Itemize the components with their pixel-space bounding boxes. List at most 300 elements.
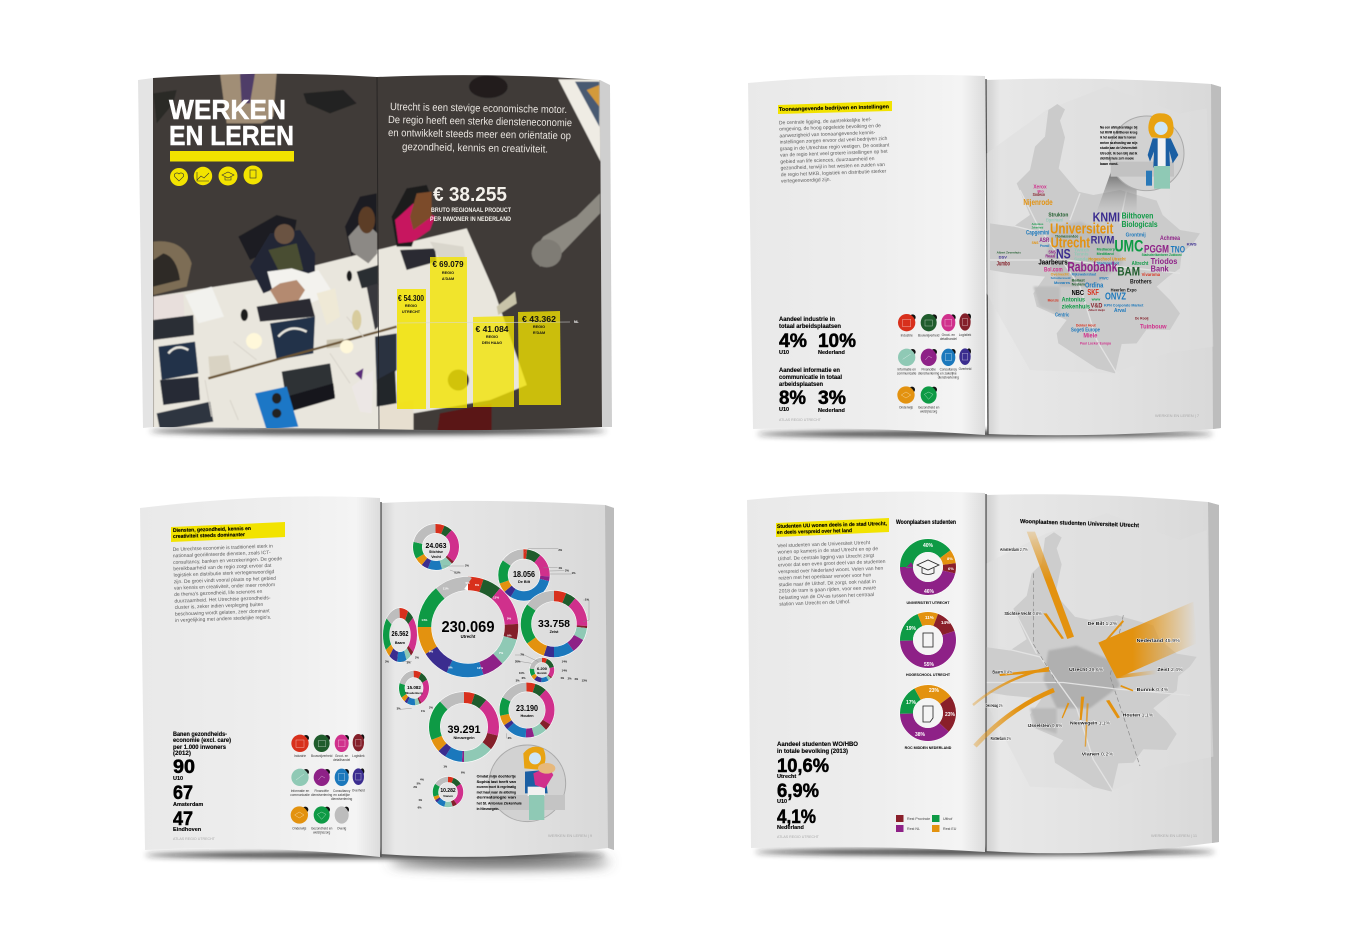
- left page: [140, 496, 380, 857]
- body text: belasting van de OV-as tussen het centraal: [779, 592, 874, 601]
- papers and keyboards: [153, 296, 154, 330]
- donut: Zeist: 33.758: [538, 618, 570, 630]
- bar chart: GRP per region: NL: [574, 320, 580, 324]
- left page: [747, 492, 985, 852]
- body text: aanwezigheid van toonaangevende kennis-: [779, 130, 876, 139]
- word cloud: Mediacorp: [1097, 248, 1116, 252]
- leader labels for small segments: 1%: [560, 676, 565, 680]
- key figures: student share: 10,6%: [777, 756, 829, 777]
- sector legend icons: Financiële: [921, 368, 936, 372]
- word cloud: Miele: [1083, 332, 1098, 339]
- leader labels for small segments: 2%: [429, 705, 433, 709]
- word cloud: Bilthoven: [1122, 211, 1153, 220]
- headline figure: gross regional product: [430, 184, 511, 223]
- key figures: industry and ICT share: Aandeel informatie en: [779, 367, 840, 374]
- intro text: en ontwikkelt steeds meer een oriëntatie op: [388, 127, 571, 142]
- bar chart: GRP per region: [397, 257, 580, 409]
- key figures: health economy jobs: (2012): [173, 750, 191, 757]
- word cloud: Eigen Haard: [1046, 218, 1063, 223]
- word cloud: Bio: [1037, 188, 1044, 193]
- leader labels for small segments: 3%: [407, 660, 411, 664]
- donut: Utrecht: 7%: [499, 651, 503, 655]
- leader labels for small segments: 14%: [562, 669, 568, 673]
- donut: Universiteit Utrecht: 40%: [923, 543, 934, 549]
- word cloud: Rabobank: [1067, 259, 1117, 275]
- donut: Vianen: [436, 780, 460, 804]
- donut: Universiteit Utrecht: 6%: [948, 566, 954, 571]
- key figures: industry and ICT share: 3%: [818, 388, 846, 409]
- key figures: health economy jobs: U10: [173, 776, 183, 782]
- word cloud: Triodos: [1151, 256, 1177, 266]
- place labels: Amsterdam 2,7%: [1000, 547, 1028, 552]
- bar chart: GRP per region: € 41.084: [476, 325, 509, 334]
- bar chart: GRP per region: REGIO: [486, 335, 498, 339]
- word cloud: Altrecht: [1132, 261, 1148, 267]
- callout: student with bubble: werken na afronding van mijn: [1099, 141, 1137, 145]
- word cloud: www: [1091, 298, 1100, 302]
- desk: [153, 228, 527, 435]
- donut: Woudenberg: 15.082: [407, 685, 421, 690]
- donut: ROC Midden Nederland: [905, 688, 956, 750]
- leader labels for small segments: 8,5%: [454, 570, 461, 574]
- key figures: industry and ICT share: [779, 316, 856, 422]
- map title: Woonplaatsen studenten Universiteit Utrecht: [1020, 519, 1139, 529]
- sector legend icons: Gezondheid en: [311, 826, 333, 830]
- donut: Utrecht: 9%: [448, 665, 453, 669]
- word cloud: TNO: [1171, 244, 1185, 254]
- leader labels for small segments: 1%: [558, 566, 563, 570]
- body text: bereikbaarheid van de regio zorgt ervoor dat: [173, 563, 272, 572]
- key figures: health economy jobs: ATLAS REGIO UTRECHT: [173, 837, 216, 841]
- key figures: health economy jobs: per 1.000 inwoners: [173, 744, 227, 751]
- word cloud: Capgemini: [1026, 230, 1049, 237]
- title: werken en leren: EN LEREN: [169, 120, 294, 151]
- callout: student with bubble: baan vond.: [1100, 162, 1118, 166]
- word cloud: Movares: [1054, 280, 1071, 285]
- sector legend icons: Groot- en: [942, 333, 955, 337]
- word cloud: Universiteit: [1050, 220, 1113, 237]
- key figures: industry and ICT share: arbeidsplaatsen: [779, 381, 823, 388]
- intro text: Utrecht is een stevige economische motor.: [390, 101, 567, 116]
- callout: doctor Sophia with child: Omdat mijn dochtertje: [477, 775, 516, 779]
- sector legend icons: dienstverlening: [331, 797, 353, 801]
- leader labels for small segments: 3%: [508, 736, 512, 740]
- word cloud: Stadsgenoot: [1097, 261, 1120, 265]
- key figures: industry and ICT share: communicatie in totaal: [779, 374, 842, 381]
- body text: cluster is, zeker indien verpleging buiten: [175, 602, 264, 611]
- donut: Utrecht: [421, 581, 512, 670]
- word cloud: [997, 184, 1197, 345]
- leader labels for small segments: 4%: [420, 778, 424, 782]
- callout: student with bubble: [1096, 113, 1184, 213]
- key figures: industry and ICT share: U10: [779, 350, 789, 356]
- heading: diensten, gezondheid: [171, 522, 285, 542]
- donut: ROC Midden Nederland: 23%: [945, 712, 956, 718]
- donut: ROC Midden Nederland: 38%: [915, 732, 926, 738]
- body text: [173, 543, 284, 624]
- sector legend icons: Bouwnijverheid: [918, 334, 940, 338]
- word cloud: Meditland: [1097, 252, 1114, 256]
- word cloud: Schuttersveld: [1051, 276, 1071, 280]
- leader labels for small segments: 13%: [582, 679, 588, 683]
- key figures: health economy jobs: economie (excl. care): [173, 737, 231, 744]
- key figures: industry and ICT share: ATLAS REGIO UTRECHT: [779, 418, 822, 422]
- leader labels for small segments: 2%: [558, 548, 563, 552]
- callout: doctor Sophia with child: het St. Antonius Ziekenhuis: [477, 801, 522, 805]
- sector legend icons: Informatie en: [291, 789, 309, 793]
- word cloud: RIVM: [1091, 234, 1114, 246]
- leader labels for small segments: 6%: [522, 676, 526, 680]
- word cloud: Ballast: [1072, 277, 1085, 282]
- word cloud: Grontmij: [1126, 233, 1146, 239]
- page number: WERKEN EN LEREN | 7: [1155, 413, 1200, 418]
- callout: doctor Sophia with child: in Nieuwegein.: [477, 807, 499, 811]
- donut: Stichtse Vecht: [418, 528, 454, 566]
- body text: Veel studenten van de Universiteit Utrecht: [777, 540, 871, 549]
- body text: consultancy, banken en verzekeringen. De goede: [173, 556, 282, 566]
- bookshelf: [558, 79, 601, 162]
- donut: ROC Midden Nederland: ROC MIDDEN NEDERLAND: [905, 746, 952, 750]
- word cloud: Strukton: [1048, 213, 1069, 219]
- donut: Universiteit Utrecht: 8%: [947, 556, 953, 561]
- donut: Baarn: Baarn: [395, 641, 405, 645]
- leader labels for small segments: 4%: [574, 677, 579, 681]
- leader labels for small segments: 2%: [465, 564, 469, 568]
- place labels: De Bilt 1,2%: [1088, 621, 1118, 626]
- word cloud: Vivaroma: [1142, 272, 1160, 277]
- bar chart: GRP per region: REGIO: [405, 304, 417, 308]
- word cloud: Paul Locker Europa: [1080, 341, 1112, 345]
- word cloud: Rijkswaterstaat: [1072, 272, 1097, 276]
- seated person below bars: [437, 404, 492, 430]
- theme icons: [170, 166, 262, 186]
- word cloud: Arval: [1114, 308, 1126, 314]
- word cloud: ziekenhuis: [1062, 303, 1090, 310]
- donut: Utrecht: 5%: [466, 581, 470, 585]
- sector legend icons: dienstverlening: [918, 372, 940, 376]
- place labels: Rotterdam 2%: [991, 736, 1011, 741]
- sector legend icons: Informatie en: [897, 368, 916, 372]
- spread 4: students: [747, 492, 1219, 855]
- body text: Uithof. De centrale ligging van Utrecht zorgt: [778, 553, 875, 562]
- right woman: [392, 185, 430, 247]
- donut: Hogeschool Utrecht: 14%: [941, 620, 950, 625]
- donut: Zeist: Zeist: [550, 630, 559, 634]
- body text: wonen op kamers in de stad Utrecht en op de: [777, 546, 878, 556]
- place labels: Zeist 2,4%: [1157, 667, 1183, 672]
- word cloud: Dekker Hout: [1076, 323, 1096, 327]
- word cloud: V&D: [1091, 303, 1102, 310]
- leader labels for small segments: 6%: [418, 805, 422, 809]
- word cloud: Tuinbouw: [1140, 323, 1167, 330]
- legend: residence: [896, 815, 957, 832]
- donut: Baarn: 26.562: [392, 629, 408, 638]
- word cloud: KWS: [1187, 242, 1197, 247]
- bar chart: GRP per region: REGIO: [442, 271, 454, 275]
- donut: Baarn: [386, 613, 414, 657]
- word cloud: KPN Corporate Market: [1104, 304, 1144, 308]
- donut: ROC Midden Nederland: 23%: [929, 688, 940, 694]
- body text: verspreid over Nederland woont. Velen van hen: [778, 566, 884, 575]
- callout: doctor Sophia with child: [477, 745, 566, 822]
- key figures: student share: 6,9%: [777, 781, 819, 802]
- sector legend icons: detailhandel: [333, 758, 350, 762]
- body text: van kennis en creativiteit, onder meer rondom: [174, 582, 275, 592]
- callout: student with bubble: Na een afstudeerstage bij: [1100, 126, 1137, 130]
- intro text: gezondheid, kennis en creativiteit.: [402, 141, 548, 156]
- title: werken en leren: WERKEN: [169, 94, 286, 125]
- sector legend icons: Overheid: [959, 367, 972, 371]
- body text: gezondheid, terwijl in het westen en zuiden van: [780, 162, 885, 172]
- heading: studenten UU: en deels verspreid over het land: [777, 528, 852, 536]
- word cloud: Menzis: [1048, 298, 1059, 302]
- word cloud: BAM: [1117, 265, 1140, 279]
- donut: Houten: Houten: [520, 714, 534, 718]
- title: werken en leren: [169, 94, 294, 151]
- donut: Hogeschool Utrecht: 19%: [906, 626, 917, 632]
- donut: Nieuwegein: 39.291: [448, 724, 480, 736]
- callout: doctor Sophia with child: eczeem moet ik regelmatig: [477, 785, 516, 789]
- callout: student with bubble: Utrecht. Ik ben blij dat ik: [1100, 151, 1137, 155]
- donut: Hogeschool Utrecht: [906, 615, 951, 677]
- place labels: Den Haag 1%: [986, 703, 1003, 708]
- body text: beschouwing wordt gelaten, zeer dominant: [175, 608, 270, 618]
- donut: Vianen: 10.282: [440, 788, 456, 794]
- sector legend icons: Bouwnijverheid: [311, 754, 333, 758]
- wood strip and cables: [208, 327, 397, 378]
- legend: residence: Rest Provincie: [907, 817, 930, 821]
- word cloud: UMC: [1114, 237, 1143, 256]
- sector legend icons: dienstverlening: [311, 793, 333, 797]
- sector legend icons: en zakelijke: [333, 793, 350, 797]
- donut: Houten: 23.190: [516, 704, 538, 713]
- donut: Bunnik: [532, 660, 552, 680]
- callout: doctor Sophia with child: Sophia last heeft van: [477, 780, 516, 784]
- monitors: [158, 342, 198, 380]
- sector legend icons: detailhandel: [940, 337, 957, 341]
- body text: omgeving, de hoog opgeleide bevolking en de: [779, 123, 881, 133]
- body text: studie naar de Uithof. Dit zorgt, ook nadat in: [779, 579, 876, 588]
- donut: Hogeschool Utrecht: 11%: [925, 615, 934, 620]
- photo: office seen from above: [150, 67, 607, 437]
- donut: Utrecht: 11%: [443, 586, 449, 590]
- donut: De Bilt: De Bilt: [518, 580, 531, 584]
- body text: in vergelijking met andere stedelijke regio's.: [175, 615, 271, 624]
- intro text: De regio heeft een sterke diensteneconomie: [388, 114, 572, 129]
- heading: toonaangevende bedrijven: [778, 101, 892, 114]
- body text: vertegenwoordigd zijn.: [781, 177, 831, 185]
- bar chart: GRP per region: REGIO: [533, 325, 545, 329]
- spread 2: companies and institutions: [748, 75, 1221, 437]
- legend: residence: Rest NL: [907, 827, 920, 831]
- key figures: industry and ICT share: U10: [779, 407, 789, 413]
- donut: Woudenberg: Woudenberg: [405, 691, 423, 695]
- body text: reizen met het openbaar vervoer voor hun: [778, 572, 872, 582]
- body text: duurzaamheid. Het Utrechtse gezondheids-: [174, 595, 271, 605]
- word cloud: PWC: [1099, 275, 1109, 280]
- key figures: industry and ICT share: 8%: [779, 388, 806, 409]
- headline figure: gross regional product: BRUTO REGIONAAL PRODUCT: [431, 207, 511, 214]
- word cloud: Nijenrode: [1023, 197, 1053, 207]
- key figures: student share: Aandeel studenten WO/HBO: [777, 741, 858, 748]
- bar chart: GRP per region: UTRECHT: [402, 310, 421, 314]
- page number: WERKEN EN LEREN | 11: [1151, 833, 1198, 838]
- body text: De Utrechtse economie is traditioneel sterk in: [173, 543, 273, 553]
- leader labels for small segments: [385, 548, 589, 809]
- body text: [777, 540, 887, 608]
- sector legend icons: Groot- en: [335, 754, 349, 758]
- donut: Hogeschool Utrecht: 55%: [924, 662, 935, 668]
- word cloud: Ordina: [1085, 282, 1103, 289]
- word cloud: Stadsdeelkantoren Zuidoost: [1142, 253, 1182, 257]
- middle woman: [345, 193, 377, 257]
- key figures: student share: [777, 741, 858, 839]
- pillar: [532, 193, 600, 267]
- donut: Bunnik: 6.200: [537, 666, 548, 671]
- donut: Woudenberg: [402, 674, 426, 702]
- man: [238, 215, 297, 260]
- leader labels for small segments: 1%: [418, 798, 423, 802]
- word cloud: Albert Zevenhuis: [997, 250, 1021, 254]
- word cloud: SKF: [1087, 288, 1099, 297]
- word cloud: Utrecht: [1051, 235, 1090, 252]
- word cloud: Achmea: [1160, 235, 1180, 242]
- place labels: [986, 547, 1183, 756]
- donut: Nieuwegein: [434, 698, 494, 756]
- word cloud: Jumbo: [997, 260, 1010, 267]
- key figures: health economy jobs: Eindhoven: [173, 827, 202, 833]
- leader labels for small segments: 1%: [443, 765, 448, 769]
- word cloud: Biologicals: [1122, 220, 1158, 229]
- word cloud: Reaal: [1045, 254, 1056, 260]
- leader labels for small segments: 2%: [568, 676, 572, 680]
- body text: instellingen zorgen ervoor dat veel bedrijven zich: [780, 136, 888, 146]
- word cloud: ONVZ: [1105, 291, 1126, 302]
- sector legend icons: Consultancy: [940, 368, 957, 372]
- leader labels for small segments: 1%: [585, 598, 589, 602]
- key figures: industry and ICT share: Nederland: [818, 350, 845, 356]
- spread 1: photo opening pages: [138, 67, 612, 437]
- leader labels for small segments: 2%: [413, 785, 418, 789]
- sector legend icons: Logistiek: [352, 754, 365, 758]
- word cloud: SNS: [1048, 249, 1057, 255]
- donut: Zeist: [526, 596, 582, 652]
- body text: zijn. De groei vindt vooral plaats op het gebied: [174, 576, 276, 585]
- body text: logistiek en distributie sterk vertegenwoordigd: [173, 569, 275, 579]
- heading: diensten, gezondheid: Diensten, gezondheid, kennis en: [173, 526, 251, 534]
- callout: student with bubble: ik het aanbod daar te komen: [1100, 136, 1136, 140]
- word cloud: Antonius: [1062, 297, 1085, 304]
- donut: Utrecht: 13%: [493, 595, 499, 599]
- word cloud: ASR: [1039, 237, 1049, 244]
- callout: student with bubble: het RIVM in Bilthoven kreeg: [1100, 131, 1137, 135]
- word cloud: SNS: [1032, 241, 1039, 245]
- key figures: industry and ICT share: 10%: [818, 331, 856, 352]
- donut: Universiteit Utrecht: UNIVERSITEIT UTRECHT: [907, 601, 950, 605]
- place labels: Baarn 0,4%: [992, 670, 1013, 675]
- chart heading: woonplaatsen: Woonplaatsen studenten: [896, 519, 956, 526]
- donut: Utrecht: 9%: [429, 650, 433, 654]
- bar chart: GRP per region: DEN HAAG: [482, 341, 502, 345]
- word cloud: KNMI: [1093, 211, 1120, 225]
- body text: 2018 de tram is gaan rijden, voor een zware: [779, 585, 876, 595]
- sector legend icons: Gezondheid en: [918, 405, 940, 409]
- donut: Hogeschool Utrecht: HOGESCHOOL UTRECHT: [906, 673, 951, 677]
- donut: Nieuwegein: Nieuwegein: [453, 736, 475, 740]
- leader labels for small segments: 1%: [572, 571, 576, 575]
- word cloud: Brothers: [1130, 280, 1152, 286]
- word cloud: Centric: [1055, 313, 1069, 319]
- bar chart: GRP per region: A'DAM: [442, 277, 454, 281]
- legend: residence: Uithof: [943, 817, 952, 821]
- leader labels for small segments: 1%: [421, 709, 425, 713]
- key figures: health economy jobs: Banen gezondheids-: [173, 731, 227, 738]
- heading: studenten UU: Studenten UU wonen deels in de stad Utrecht,: [777, 521, 888, 530]
- place labels: IJsselstein 0,6%: [1028, 723, 1063, 728]
- word cloud: Overvecht: [1051, 272, 1069, 276]
- leader labels for small segments: 3%: [385, 659, 389, 663]
- page number: WERKEN EN LEREN | 9: [548, 833, 593, 838]
- right page: [381, 501, 614, 857]
- headline figure: gross regional product: € 38.255: [433, 184, 507, 206]
- word cloud: Sodexo: [1033, 192, 1045, 197]
- word cloud: Antonius: [1032, 222, 1044, 226]
- place labels: Stichtse Vecht 0,8%: [1004, 611, 1042, 616]
- flow arrows: [999, 532, 1197, 747]
- body text: de thema's gezondheid, life sciences en: [174, 589, 263, 598]
- right page: [986, 79, 1221, 435]
- donut: Stichtse Vecht: 24.063: [426, 541, 446, 550]
- body text: De centrale ligging, de aantrekkelijke leef-: [779, 117, 872, 126]
- spread 3: services, health, knowledge: [140, 496, 614, 868]
- key figures: student share: Utrecht: [777, 774, 796, 780]
- sector legend icons: welzijnszorg: [920, 409, 937, 413]
- word cloud: Jaarbeurs: [1038, 257, 1068, 266]
- donut: Universiteit Utrecht: [906, 543, 954, 605]
- donut: Utrecht: Utrecht: [461, 634, 476, 639]
- sector legend icons: [897, 313, 972, 413]
- word cloud: De Rooij: [1135, 316, 1149, 320]
- donut: Bunnik: Bunnik: [537, 671, 547, 675]
- donut: Stichtse Vecht: Vecht: [431, 555, 442, 559]
- key figures: health economy jobs: Amsterdam: [173, 802, 203, 808]
- donut: De Bilt: [503, 554, 545, 596]
- sector legend icons: Onderwijs: [292, 826, 307, 830]
- body text: van de regio kent veel grotere instellingen op het: [780, 149, 888, 159]
- body text: station van Utrecht en de Uithof.: [779, 599, 851, 608]
- leader labels for small segments: 3%: [397, 706, 401, 710]
- donut: Utrecht: 6%: [475, 583, 479, 587]
- body text: nationaal georiënteerde diensten, zoals ICT-: [173, 550, 271, 559]
- leader labels for small segments: 5%: [417, 781, 421, 785]
- intro text: [388, 101, 572, 156]
- key figures: student share: ATLAS REGIO UTRECHT: [777, 835, 820, 839]
- key figures: health economy jobs: 47: [173, 809, 193, 830]
- heading: toonaangevende bedrijven: Toonaangevende bedrijven en instellingen: [779, 104, 889, 113]
- word cloud: Sanders: [1074, 256, 1093, 261]
- word cloud: Twitch: [1074, 248, 1089, 254]
- word cloud: Tennis: [1074, 252, 1089, 257]
- leader labels for small segments: 2%: [565, 569, 569, 573]
- word cloud: Heerlen Expo: [1111, 287, 1137, 292]
- leader labels for small segments: 3%: [516, 679, 520, 683]
- donut: ROC Midden Nederland: 17%: [906, 700, 917, 706]
- key figures: industry and ICT share: Nederland: [818, 408, 845, 414]
- donut: Utrecht: 230.069: [442, 619, 495, 636]
- gutter keyboards: [357, 265, 378, 288]
- left page: [748, 75, 985, 435]
- word cloud: Hogeschool Utrecht: [1088, 256, 1126, 261]
